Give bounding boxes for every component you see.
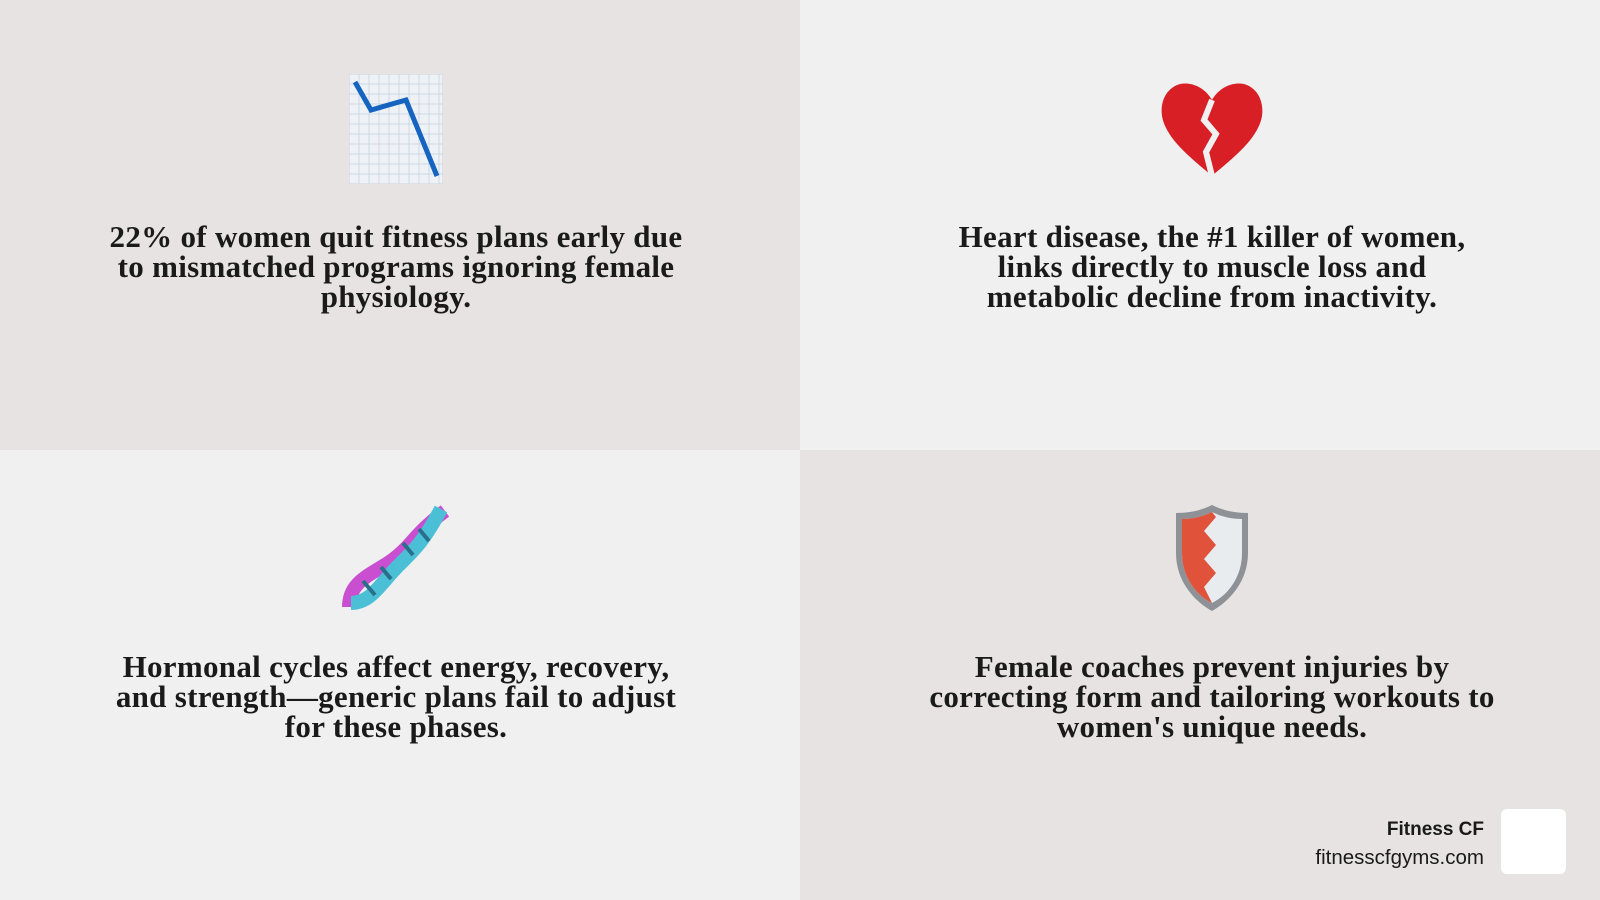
text: hormonal cycles: for these phases. [285, 709, 507, 744]
icon: broken heart [1162, 84, 1262, 176]
text: heart disease: Heart disease, the #1 killer of women, [959, 219, 1465, 254]
text: heart disease: metabolic decline from inactivity. [987, 279, 1437, 314]
icon: DNA [342, 505, 450, 610]
text: female coaches: Female coaches prevent injuries by [975, 649, 1449, 684]
text: quit statistic: 22% of women quit fitness plans early due [110, 219, 682, 254]
text: female coaches: correcting form and tailoring workouts to [929, 679, 1495, 714]
panel: heart disease [800, 0, 1600, 450]
text: heart disease: links directly to muscle loss and [998, 249, 1426, 284]
panel: quit rate [0, 0, 800, 450]
text: quit statistic: to mismatched programs ignoring female [118, 249, 674, 284]
text: female coaches [929, 649, 1495, 744]
text: heart disease [959, 219, 1465, 314]
text: quit statistic [110, 219, 682, 314]
panel: hormonal cycles [0, 450, 800, 900]
brand: Fitness CF: fitnesscfgyms.com [1315, 846, 1484, 869]
icon: declining chart [349, 74, 443, 184]
icon: shield [1176, 505, 1248, 611]
text: hormonal cycles: and strength—generic plans fail to adjust [116, 679, 676, 714]
logo box [1501, 809, 1566, 874]
text: hormonal cycles [116, 649, 676, 744]
brand: Fitness CF: Fitness CF [1387, 819, 1484, 840]
panel: female coaches [800, 450, 1600, 900]
brand: Fitness CF [1315, 819, 1484, 869]
text: hormonal cycles: Hormonal cycles affect energy, recovery, [123, 649, 669, 684]
text: female coaches: women's unique needs. [1057, 709, 1367, 744]
text: quit statistic: physiology. [321, 279, 471, 314]
